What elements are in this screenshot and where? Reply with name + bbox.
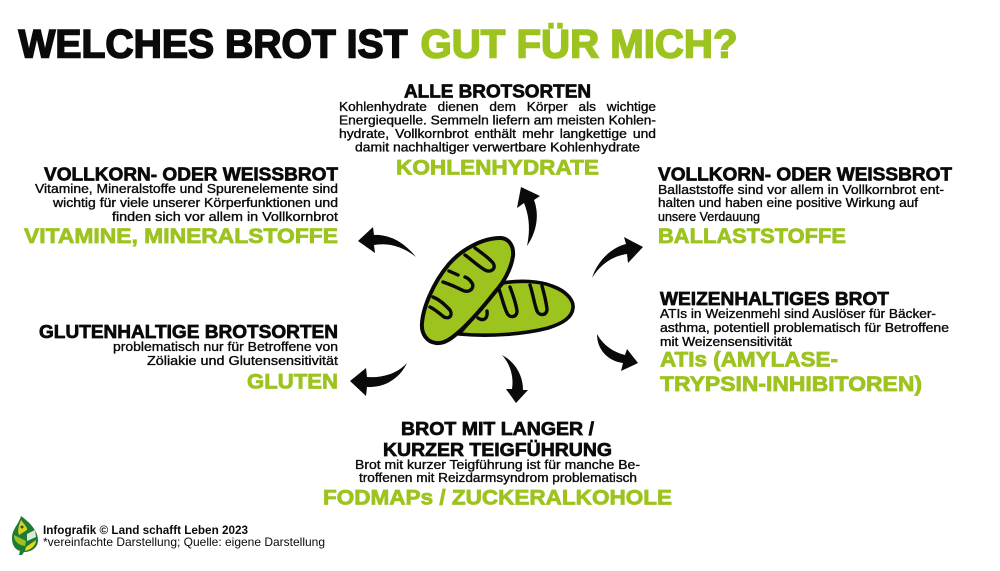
arrow: to Gluten (350, 363, 407, 396)
title: GUT FÜR MICH? (420, 22, 738, 66)
text block: Vitamine description (35, 182, 339, 224)
text block: FODMAPs description: troffenen mit Reizdarmsyndrom problematisch (359, 471, 637, 485)
heading: Glutenhaltige Brotsorten: GLUTENHALTIGE BROTSORTEN (39, 322, 338, 342)
panel: FODMAPs (323, 419, 672, 510)
text block: Vitamine description: finden sich vor allem in Vollkornbrot (112, 210, 339, 224)
panel: Kohlenhydrate (339, 82, 656, 180)
heading: Weizenhaltiges Brot: WEIZENHALTIGES BROT (660, 289, 889, 309)
text block: Kohlenhydrate description (339, 100, 656, 154)
text block: Gluten description: Zöliakie und Glutensensitivität (147, 354, 339, 368)
text block: Kohlenhydrate description: Energiequelle. Semmeln liefern am meisten Kohlen- (339, 114, 656, 128)
text block: Gluten description: problematisch nur für Betroffene von (113, 340, 338, 354)
panel: Gluten (39, 322, 339, 394)
heading: Vollkorn- oder Weissbrot: VOLLKORN- ODER WEISSBROT (44, 165, 338, 185)
text block: Vitamine description: wichtig für viele unserer Körperfunktionen und (52, 196, 338, 210)
icon: leaf logo (12, 516, 38, 555)
text block: Ballaststoffe description: Ballaststoffe sind vor allem in Vollkornbrot ent- (658, 183, 944, 197)
text block: Kohlenhydrate description: damit nachhaltiger verwertbare Kohlenhydrate (355, 140, 640, 154)
footer credits: Infografik © Land schafft Leben 2023 (43, 523, 248, 537)
footer credits: *vereinfachte Darstellung; Quelle: eigene Darstellung (43, 535, 325, 549)
label: ATIs (660, 347, 922, 396)
text block: Ballaststoffe description (658, 183, 944, 224)
title (18, 22, 738, 66)
text block: ATIs description: mit Weizensensitivität (660, 335, 793, 349)
heading: Brot mit langer / kurzer Teigführung: BROT MIT LANGER / (401, 419, 594, 439)
text block: ATIs description: ATIs in Weizenmehl sind Auslöser für Bäcker- (660, 307, 936, 321)
text block: Ballaststoffe description: unsere Verdauung (658, 210, 760, 224)
title: WELCHES BROT IST (18, 22, 408, 66)
back loaf (459, 281, 573, 335)
text block: Kohlenhydrate description: hydrate, Vollkornbrot enthält mehr langkettige und (339, 127, 656, 141)
label: ATIs: ATIs (AMYLASE- (660, 347, 838, 371)
text block: ATIs description: asthma, potentiell problematisch für Betroffene (660, 321, 949, 335)
text block: Vitamine description: Vitamine, Mineralstoffe und Spurenelemente sind (35, 182, 338, 196)
footer credits (43, 523, 325, 549)
panel: Ballaststoffe (658, 165, 952, 248)
text block: Kohlenhydrate description: Kohlenhydrate dienen dem Körper als wichtige (339, 100, 656, 114)
panel: Vitamine, Mineralstoffe (24, 165, 339, 248)
arrow: to ATIs (597, 334, 638, 371)
label: Kohlenhydrate: KOHLENHYDRATE (396, 156, 599, 180)
heading: Brot mit langer / kurzer Teigführung: KURZER TEIGFÜHRUNG (383, 440, 612, 460)
front loaf (422, 238, 513, 343)
text block: ATIs description (660, 307, 949, 349)
label: FODMAPs: FODMAPs / ZUCKERALKOHOLE (323, 486, 672, 510)
label: ATIs: TRYPSIN-INHIBITOREN) (660, 372, 922, 396)
text block: FODMAPs description (355, 458, 640, 485)
arrow: to Kohlenhydrate (517, 187, 540, 246)
label: Ballaststoffe: BALLASTSTOFFE (658, 224, 846, 248)
text block: FODMAPs description: Brot mit kurzer Teigführung ist für manche Be- (355, 458, 640, 472)
heading: Alle Brotsorten: ALLE BROTSORTEN (404, 82, 591, 102)
label: Gluten: GLUTEN (247, 370, 338, 394)
arrow: to FODMAPs (502, 355, 528, 403)
panel: ATIs (660, 289, 949, 396)
heading: Vollkorn- oder Weissbrot: VOLLKORN- ODER WEISSBROT (658, 165, 952, 185)
arrow: to Vitamine, Mineralstoffe (358, 227, 416, 257)
text block: Gluten description (113, 340, 339, 368)
arrow: to Ballaststoffe (592, 237, 643, 278)
text block: Ballaststoffe description: halten und haben eine positive Wirkung auf (658, 196, 919, 210)
icon: bread loaves (422, 238, 573, 343)
heading: Brot mit langer / kurzer Teigführung (383, 419, 612, 460)
label: Vitamine, Mineralstoffe: VITAMINE, MINERALSTOFFE (24, 224, 338, 248)
